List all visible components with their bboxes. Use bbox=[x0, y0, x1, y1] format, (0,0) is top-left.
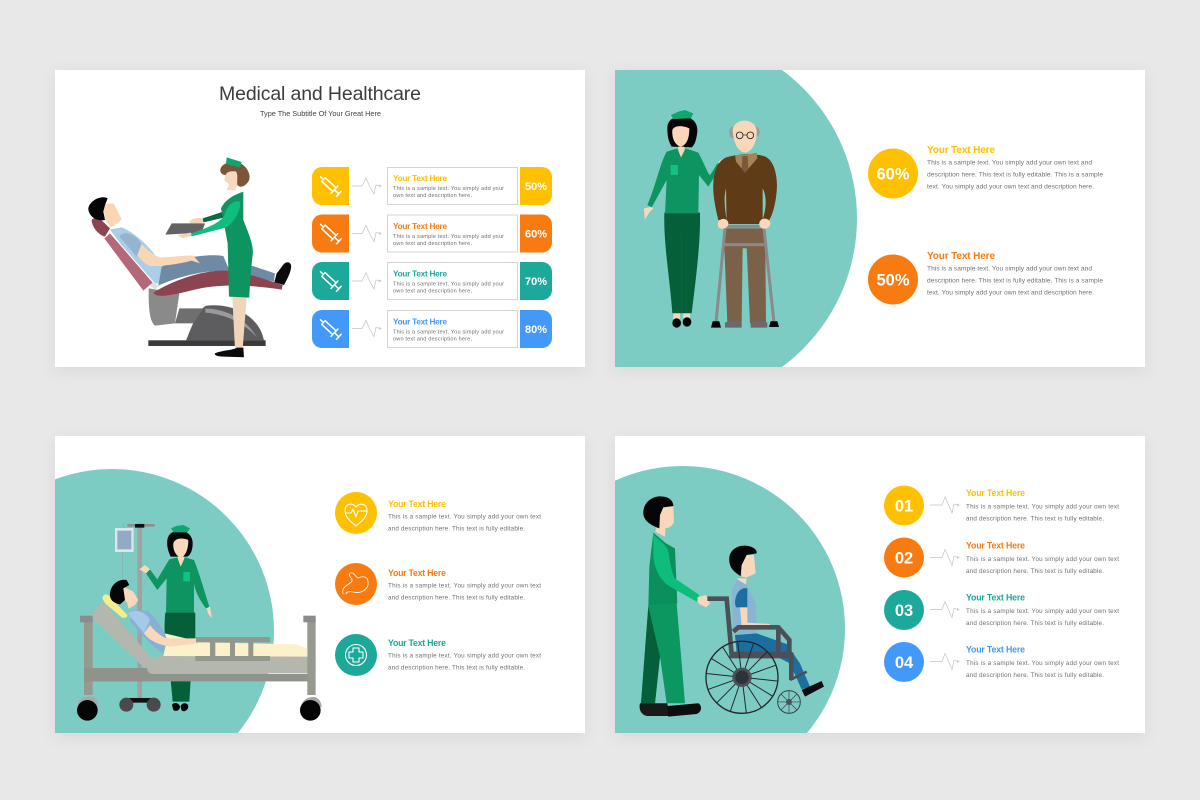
icon: syringe bbox=[317, 316, 342, 340]
stat: 60% bbox=[868, 145, 1103, 198]
text block: This is a sample text. You simply add your own text bbox=[966, 556, 1119, 563]
text block: Your Text Here bbox=[927, 145, 995, 156]
text block: This is a sample text. You simply add your own text bbox=[966, 608, 1119, 615]
pulse arrow bbox=[352, 226, 381, 242]
text block: Your Text Here bbox=[966, 540, 1025, 550]
text block: Your Text Here bbox=[393, 222, 447, 231]
text block: text. You simply add your own text and description here. bbox=[927, 290, 1094, 296]
row 1: 50% bbox=[312, 167, 552, 205]
text block bbox=[388, 638, 541, 672]
text block: and description here. This text is fully editable. bbox=[966, 568, 1104, 575]
text block bbox=[966, 644, 1119, 679]
text block: This is a sample text. You simply add your own text bbox=[966, 660, 1119, 667]
pulse arrow bbox=[352, 273, 381, 289]
text block: text. You simply add your own text and description here. bbox=[927, 184, 1094, 190]
text block: own text and description here. bbox=[393, 193, 472, 199]
text block: Your Text Here bbox=[388, 638, 446, 648]
text block: description here. This text is fully editable. This is a sample bbox=[927, 172, 1103, 178]
text block: This is a sample text. You simply add your own text and bbox=[927, 266, 1092, 272]
text block: Your Text Here bbox=[393, 270, 447, 278]
pulse arrow bbox=[352, 320, 381, 336]
text block: Your Text Here bbox=[927, 251, 995, 262]
text block bbox=[966, 488, 1119, 522]
text block: Your Text Here bbox=[966, 488, 1025, 498]
item 04: 04 bbox=[895, 654, 914, 672]
row 3: 70% bbox=[312, 262, 552, 300]
pulse arrow bbox=[352, 178, 381, 194]
text block: Your Text Here bbox=[393, 174, 447, 183]
row 2: 60% bbox=[312, 214, 552, 252]
text block: This is a sample text. You simply add your own text bbox=[966, 504, 1119, 510]
stat: 50%: 50% bbox=[876, 272, 910, 290]
icon: cross in circle bbox=[346, 644, 366, 666]
pulse arrow bbox=[930, 497, 959, 513]
text block: own text and description here. bbox=[393, 336, 472, 342]
value: 50% bbox=[525, 181, 547, 193]
stat: 50% bbox=[868, 251, 1103, 304]
panel: wheelchair slide bbox=[615, 436, 1145, 736]
panel: elderly care slide bbox=[615, 70, 1145, 370]
text block: and description here. This text is fully editable. bbox=[388, 594, 525, 602]
item 01 bbox=[884, 486, 1119, 526]
value: 60% bbox=[525, 228, 547, 240]
stat: 60%: 60% bbox=[876, 166, 910, 184]
item 02: 02 bbox=[895, 550, 913, 568]
text block: Your Text Here bbox=[388, 499, 446, 509]
item 03: 03 bbox=[895, 602, 913, 620]
text block bbox=[393, 270, 504, 294]
icon: syringe bbox=[317, 268, 342, 292]
text block: This is a sample text. You simply add your own text bbox=[388, 652, 541, 660]
pulse arrow bbox=[930, 550, 959, 566]
item 04 bbox=[884, 642, 1119, 682]
text block bbox=[393, 222, 504, 247]
text block: own text and description here. bbox=[393, 241, 472, 247]
pulse arrow bbox=[930, 602, 959, 618]
item: heart care bbox=[335, 492, 541, 534]
text block: and description here. This text is fully editable. bbox=[388, 664, 525, 672]
illustration: nurse with elderly man on walker bbox=[644, 110, 779, 328]
subtitle: Type The Subtitle Of Your Great Here bbox=[260, 109, 381, 118]
text block bbox=[966, 592, 1119, 627]
text block: This is a sample text. You simply add your bbox=[393, 282, 504, 288]
text block: and description here. This text is fully editable. bbox=[966, 516, 1104, 522]
text block: description here. This text is fully editable. This is a sample bbox=[927, 278, 1103, 284]
text block bbox=[388, 568, 541, 602]
text block: This is a sample text. You simply add your bbox=[393, 186, 504, 192]
text block: Your Text Here bbox=[388, 568, 446, 578]
text block bbox=[927, 251, 1103, 296]
icon: stomach bbox=[343, 573, 368, 594]
title: Medical and Healthcare bbox=[219, 83, 421, 105]
icon: heart bbox=[345, 504, 367, 526]
icon: syringe bbox=[317, 221, 342, 245]
text block: Your Text Here bbox=[966, 644, 1025, 654]
item 03 bbox=[884, 590, 1119, 630]
panel: dental chair slide bbox=[55, 70, 585, 367]
text block bbox=[388, 499, 541, 532]
text block: This is a sample text. You simply add your bbox=[393, 234, 504, 240]
text block: and description here. This text is fully editable. bbox=[966, 672, 1104, 679]
text block: own text and description here. bbox=[393, 288, 472, 294]
text block: This is a sample text. You simply add your bbox=[393, 330, 504, 336]
text block bbox=[393, 318, 504, 342]
text block: and description here. This text is fully editable. bbox=[966, 620, 1104, 627]
text block: This is a sample text. You simply add your own text and bbox=[927, 160, 1092, 166]
icon: syringe bbox=[317, 173, 342, 197]
illustration: nurse and patient in hospital bed bbox=[77, 523, 322, 721]
text block: Your Text Here bbox=[393, 318, 447, 326]
text block bbox=[966, 540, 1119, 575]
text block: This is a sample text. You simply add your own text bbox=[388, 514, 541, 520]
value: 80% bbox=[525, 324, 547, 336]
text block bbox=[927, 145, 1103, 190]
item: medical cross bbox=[335, 634, 541, 676]
text block: This is a sample text. You simply add your own text bbox=[388, 582, 541, 590]
text block: and description here. This text is fully editable. bbox=[388, 526, 525, 532]
item: stomach bbox=[335, 563, 541, 605]
item 01: 01 bbox=[895, 498, 913, 516]
text block bbox=[393, 174, 504, 199]
pulse arrow bbox=[930, 654, 959, 670]
text block: Your Text Here bbox=[966, 592, 1025, 602]
illustration: nurse and patient in dental chair bbox=[88, 157, 291, 357]
illustration: caregiver pushing wheelchair bbox=[640, 496, 824, 717]
item 02 bbox=[884, 538, 1119, 578]
row 4: 80% bbox=[312, 310, 552, 348]
panel: hospital bed slide bbox=[55, 436, 585, 736]
value: 70% bbox=[525, 276, 547, 288]
